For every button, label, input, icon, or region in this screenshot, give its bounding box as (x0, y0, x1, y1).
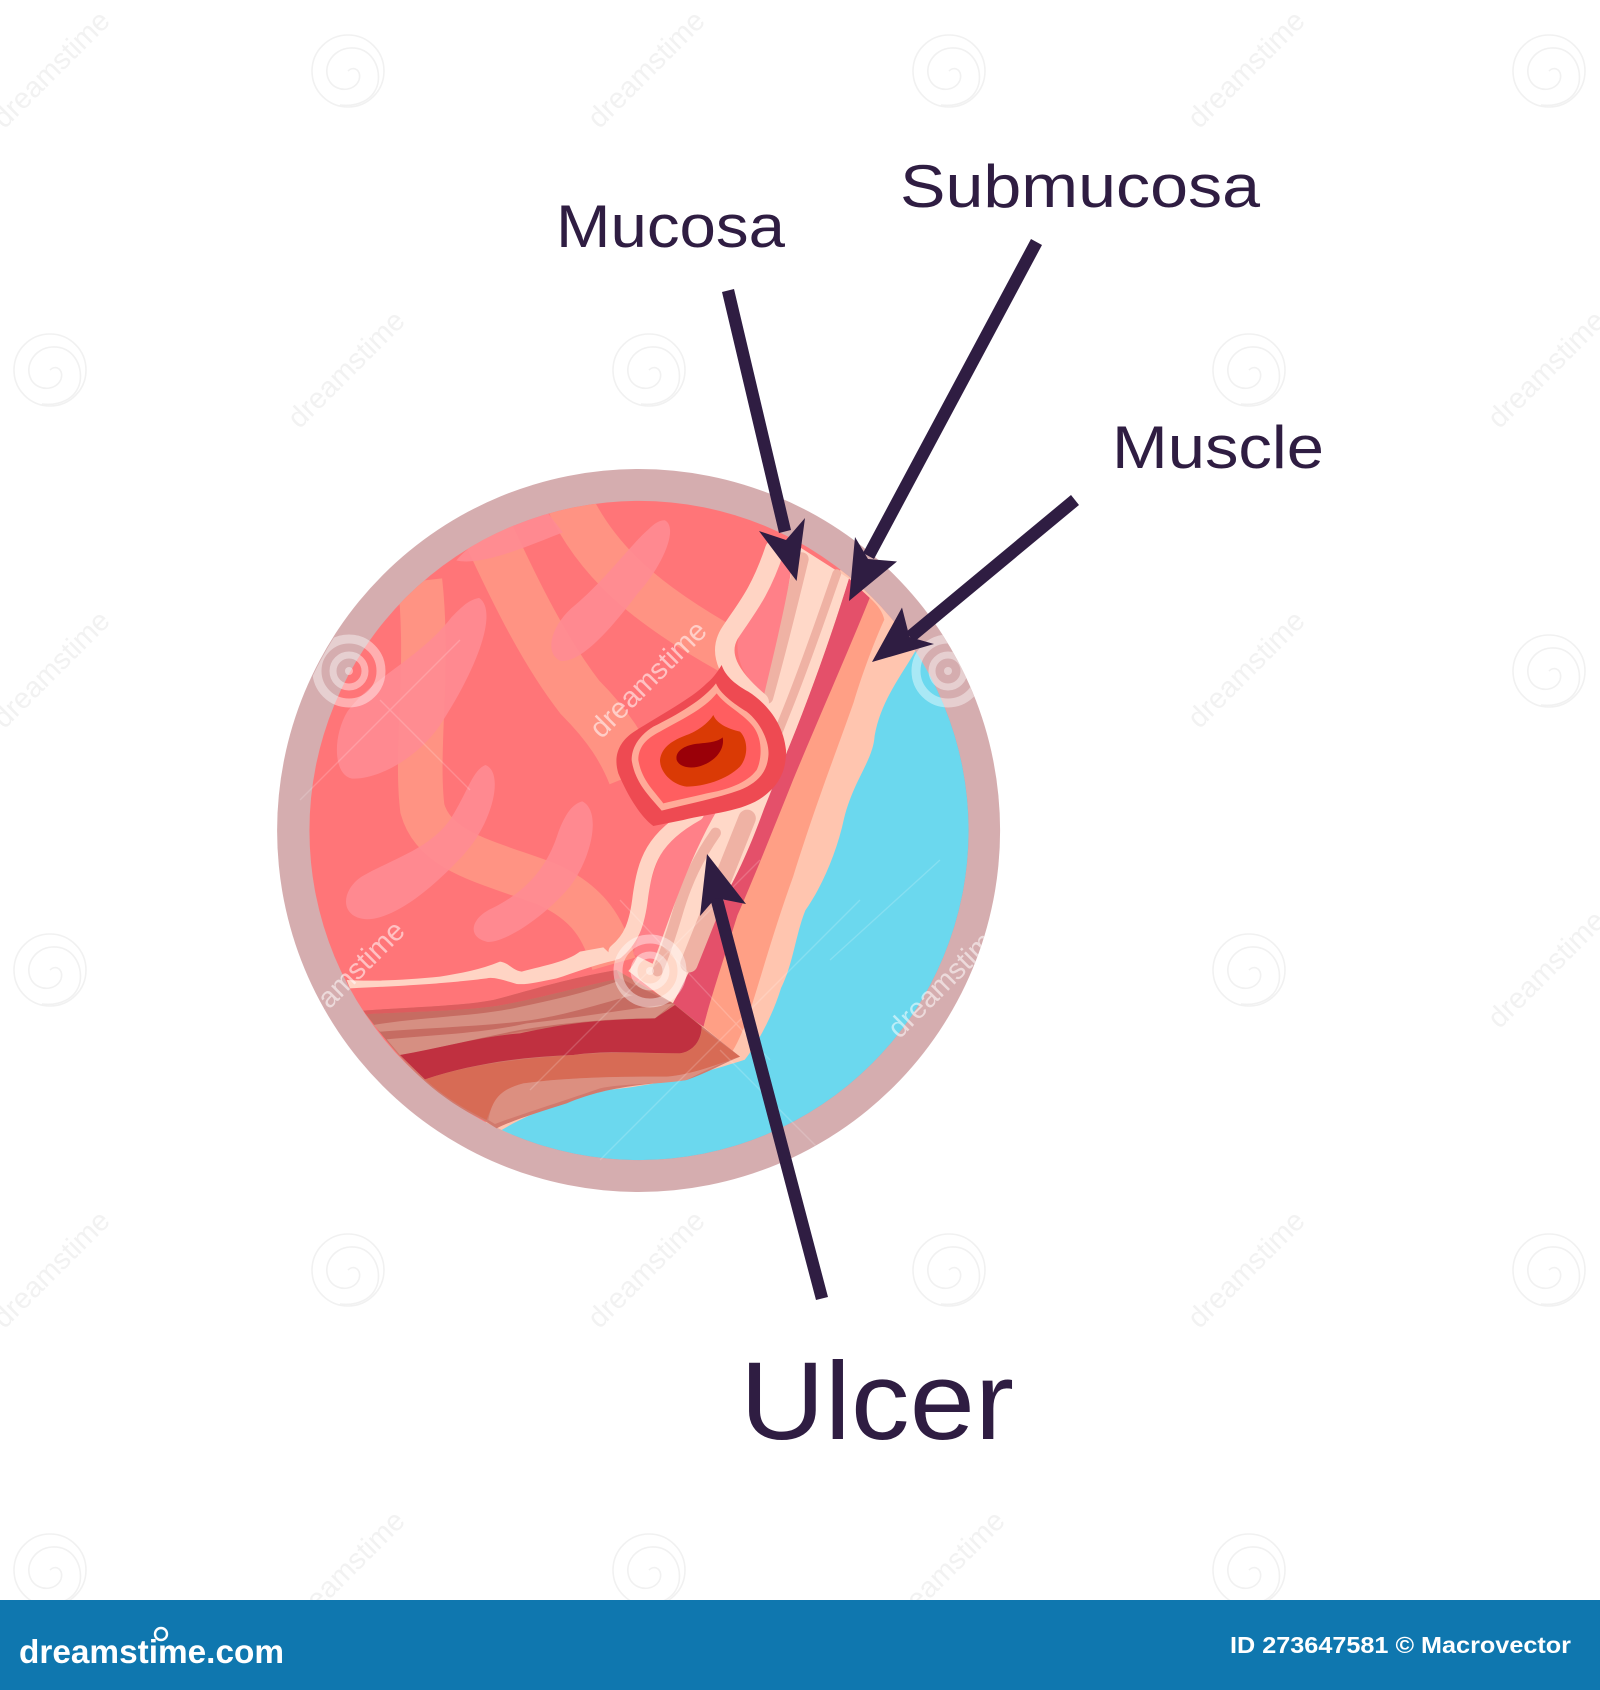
arrow: submucosa (849, 239, 1042, 601)
label: Submucosa: Submucosa (900, 153, 1261, 220)
ulcer outer rim (616, 665, 786, 826)
mucosa layer (616, 545, 849, 1005)
arrow: muscle (872, 495, 1079, 662)
ulcer inner (638, 693, 761, 803)
ulcer crater (660, 715, 746, 787)
anatomy circle (277, 469, 1000, 1192)
ulcer (616, 665, 786, 826)
lower mucosa band (347, 947, 617, 988)
watermarks on art (282, 615, 1012, 1180)
footer bar (0, 1600, 1600, 1690)
ulcer pale ring (632, 683, 769, 811)
title: Ulcer: Ulcer (740, 1340, 1014, 1463)
background watermark pattern: dreamstime (1182, 1205, 1312, 1335)
background watermark pattern: dreamstime (882, 1505, 1012, 1635)
watermarks on art: dreamstime (282, 915, 412, 1045)
stomach lining (310, 500, 969, 1160)
stomach cavity blue (502, 651, 969, 1160)
ulcer core (676, 737, 723, 768)
watermarks on art: dreamstime (584, 615, 714, 745)
arrow: mucosa (722, 289, 805, 581)
footer logo: dreamstime.com (19, 1633, 284, 1670)
muscle layer (704, 598, 884, 1051)
background watermark pattern: dreamstime (282, 1505, 412, 1635)
label: Muscle: Muscle (1112, 414, 1324, 481)
background watermark pattern: dreamstime (1182, 605, 1312, 735)
watermarks on art: dreamstime (882, 915, 1012, 1045)
background watermark pattern: dreamstime (582, 5, 712, 135)
stomach wall illustration (310, 500, 969, 1160)
background watermark pattern: dreamstime (282, 305, 412, 435)
label: Mucosa: Mucosa (556, 193, 786, 260)
background watermark pattern: dreamstime (1182, 5, 1312, 135)
footer credit: ID 273647581 © Macrovector (1230, 1632, 1571, 1658)
arrow: ulcer (700, 854, 828, 1300)
submucosa layer (672, 578, 870, 1027)
background watermark pattern: dreamstime (582, 1205, 712, 1335)
lower wall cross-section (347, 947, 740, 1128)
outer wall layer (468, 566, 939, 1138)
outer ring (277, 469, 1000, 1192)
